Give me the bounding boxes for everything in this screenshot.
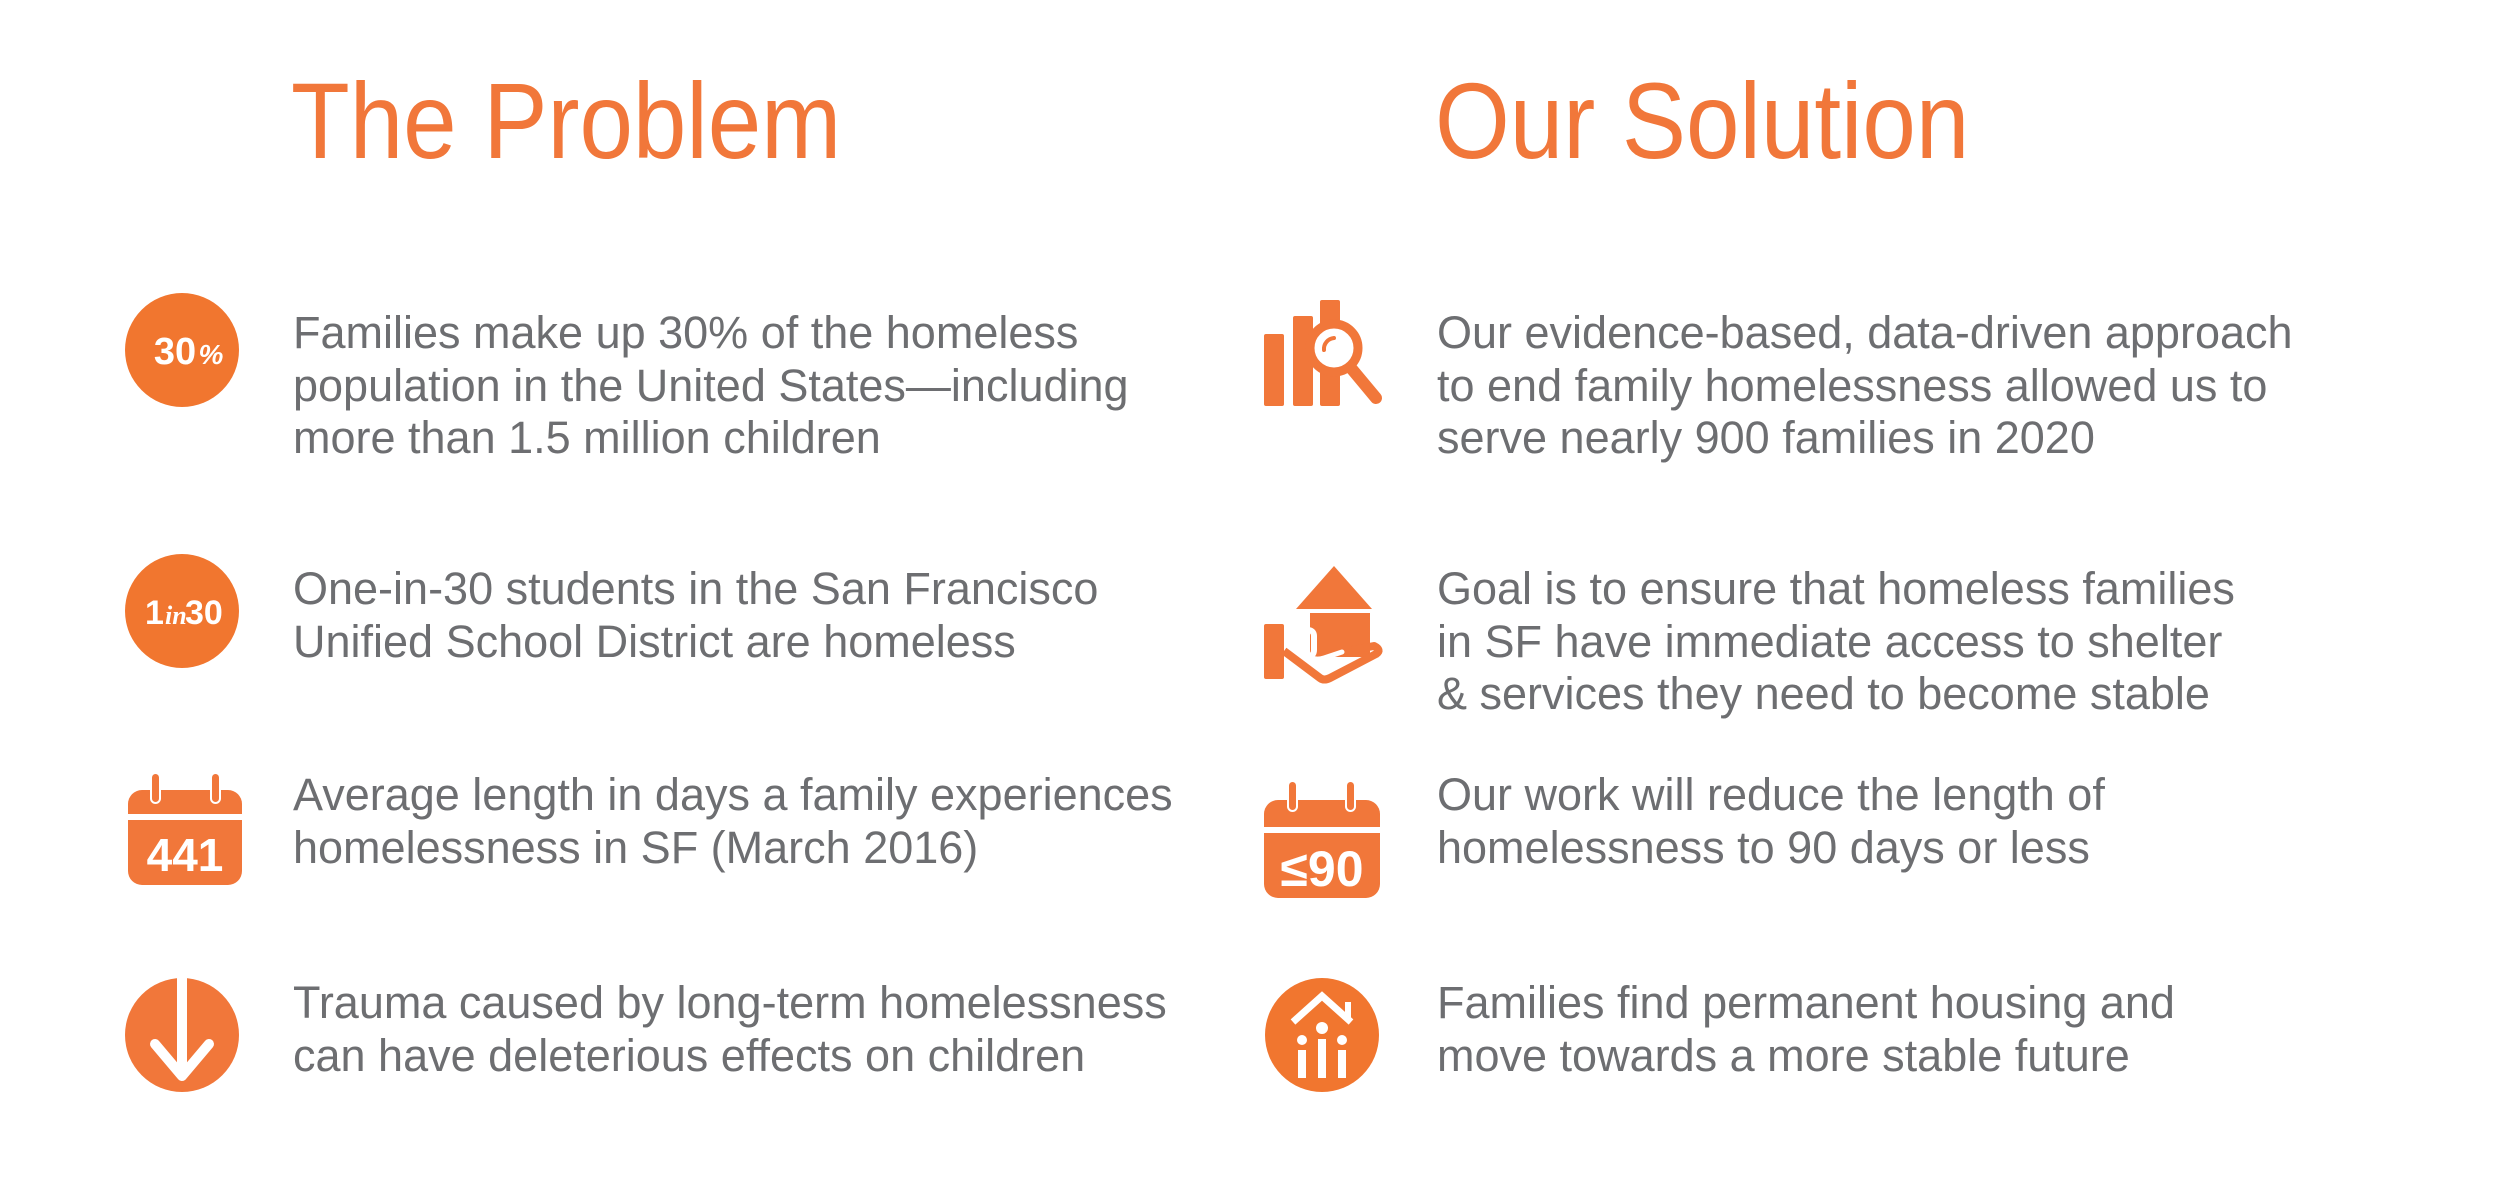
icon: 30% circle [125, 293, 239, 407]
text: reduce length: homelessness to 90 days or less [1437, 822, 2090, 872]
text: evidence-based: to end family homelessness allowed us to [1437, 360, 2267, 410]
text: goal: & services they need to become stable [1437, 668, 2210, 719]
text: permanent housing: Families find permanent housing and [1437, 977, 2175, 1028]
text: permanent housing: move towards a more stable future [1437, 1030, 2130, 1080]
icon: calendar 441: 441 [147, 829, 223, 881]
icon: 1 in 30 circle: in [165, 601, 187, 630]
text: average length [293, 769, 1173, 872]
text: trauma: Trauma caused by long-term homelessness [293, 977, 1167, 1028]
text: families 30%: population in the United States—including [293, 360, 1129, 410]
text: average length: homelessness in SF (March 2016) [293, 822, 978, 872]
text: evidence-based: serve nearly 900 families in 2020 [1437, 412, 2095, 463]
text: one in 30 [293, 563, 1098, 666]
icon: house in hand [1264, 566, 1383, 684]
icon: family home circle [1265, 978, 1379, 1092]
title: The Problem: The Problem [291, 60, 841, 181]
text: one in 30: One-in-30 students in the San Francisco [293, 563, 1098, 614]
icon: 1 in 30 circle: 30 [185, 594, 223, 632]
text: permanent housing [1437, 977, 2175, 1080]
icon: 1 in 30 circle [125, 554, 239, 668]
text: goal: in SF have immediate access to shelter [1437, 616, 2222, 666]
text: trauma: can have deleterious effects on children [293, 1030, 1085, 1080]
text: evidence-based [1437, 307, 2293, 463]
text: families 30% [293, 307, 1129, 463]
text: goal: Goal is to ensure that homeless families [1437, 563, 2235, 614]
text: families 30%: more than 1.5 million children [293, 412, 881, 463]
text: reduce length [1437, 769, 2105, 872]
icon: down arrow circle [125, 978, 239, 1092]
icon: calendar ≤90: ≤90 [1280, 841, 1364, 897]
text: goal [1437, 563, 2235, 719]
icon: 30% circle: % [199, 339, 224, 370]
text: one in 30: Unified School District are homeless [293, 616, 1016, 666]
text: evidence-based: Our evidence-based, data-driven approach [1437, 307, 2293, 358]
icon: data bars magnifier [1264, 300, 1382, 406]
icon: calendar ≤90 [1264, 782, 1380, 898]
text: families 30%: Families make up 30% of the homeless [293, 307, 1078, 358]
icon: calendar 441 [128, 774, 242, 885]
text: reduce length: Our work will reduce the length of [1437, 769, 2105, 820]
text: trauma [293, 977, 1167, 1080]
title: Our Solution: Our Solution [1435, 60, 1969, 181]
icon: 1 in 30 circle: 1 [145, 594, 164, 632]
text: average length: Average length in days a family experiences [293, 769, 1173, 820]
icon: 30% circle: 30 [154, 331, 196, 373]
